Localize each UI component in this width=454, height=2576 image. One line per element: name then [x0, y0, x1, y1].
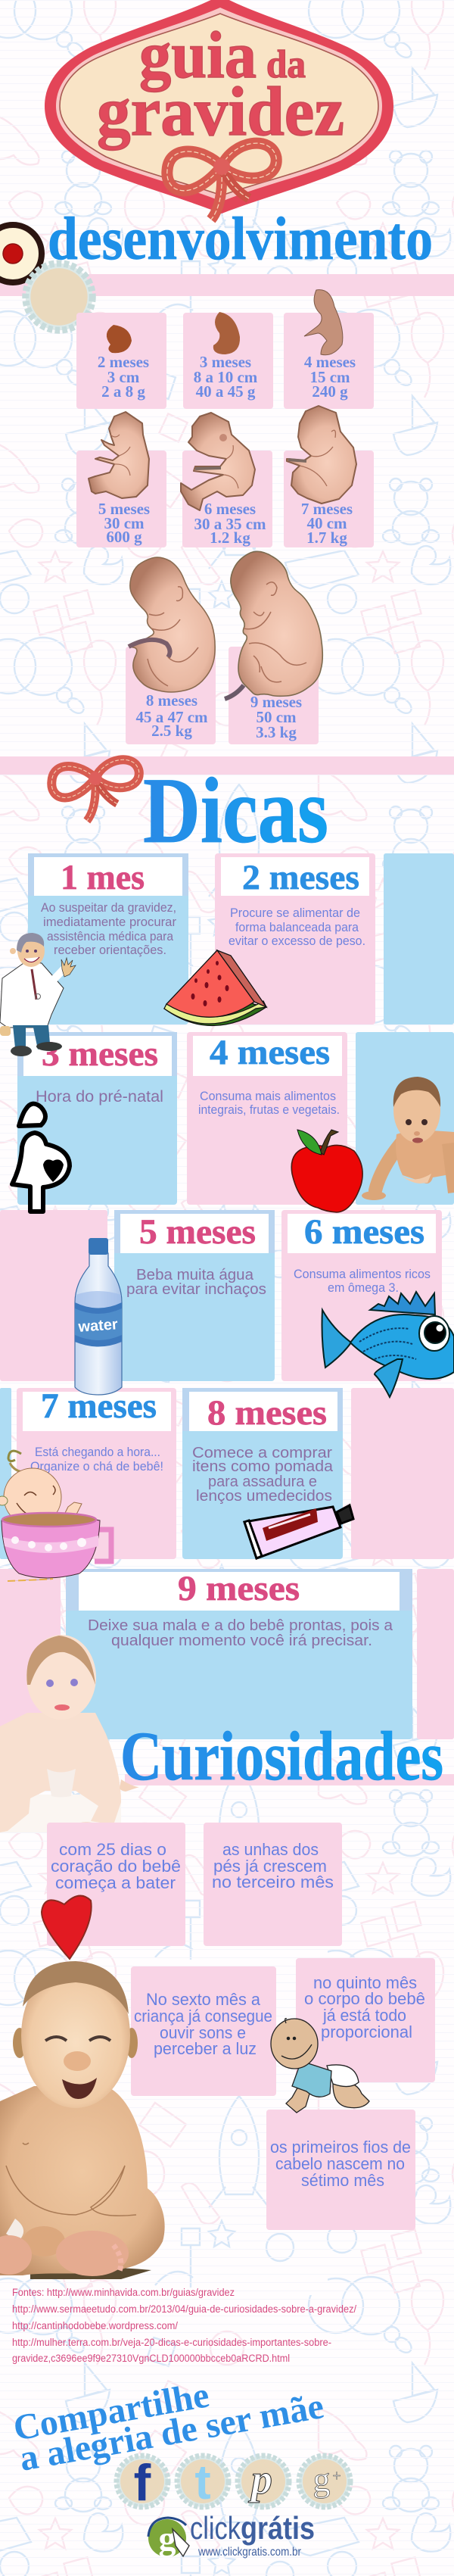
- panel: pink filler 1: [0, 1210, 107, 1381]
- body text: [294, 1268, 431, 1295]
- panel: blue filler 2: [356, 1032, 454, 1205]
- icon: water bottle: water: [77, 1316, 119, 1336]
- body text: assistência médica para: [47, 930, 174, 943]
- photo: crawling baby: [362, 1077, 454, 1200]
- panel: 9 meses: [66, 1569, 412, 1739]
- text: proporcional: [321, 2022, 412, 2041]
- icon: red heart: [42, 1896, 92, 1959]
- header: [120, 1214, 269, 1253]
- text: no terceiro mês: [212, 1873, 334, 1891]
- title badge: [45, 0, 393, 214]
- card: 25 dias: [47, 1823, 185, 1946]
- body text: Beba muita água: [136, 1267, 254, 1283]
- panel: pink filler 4: [417, 1569, 454, 1739]
- heading: compartilhe: Compartilhe: [11, 2375, 212, 2449]
- text: 2 meses: 2 a 8 g: [101, 382, 145, 401]
- decorative doily: [26, 264, 92, 330]
- body text: Deixe sua mala e a do bebê prontas, pois a: [88, 1617, 393, 1634]
- card: primeiros fios: [266, 2110, 415, 2230]
- heading: 8 meses: [207, 1393, 327, 1433]
- text: 5 meses: 600 g: [106, 528, 142, 546]
- body text: Ao suspeitar da gravidez,: [41, 901, 176, 915]
- body text: Consuma alimentos ricos: [294, 1268, 431, 1281]
- heading band: curiosidades: [125, 1774, 454, 1785]
- icon: pinterest: p: [248, 2456, 272, 2503]
- text: [270, 2138, 411, 2190]
- body text: lenços umedecidos: [196, 1488, 332, 1505]
- icon: fetus 3: [213, 312, 240, 354]
- panel: 1 mes: [28, 853, 188, 1024]
- text: 8 meses: 8 meses: [146, 691, 197, 709]
- card: sexto mes: [131, 1966, 276, 2096]
- header: [79, 1572, 400, 1611]
- panel: 3 meses: [17, 1032, 177, 1205]
- icon: fetus 7: [287, 406, 356, 504]
- ribbon bow: [167, 143, 276, 220]
- text: 7 meses: 7 meses: [301, 500, 353, 518]
- text: No sexto mês a: [146, 1990, 261, 2009]
- icon: fetus 5: [89, 412, 149, 498]
- panel: fetus 4 meses: [284, 290, 374, 409]
- text: criança já consegue: [134, 2007, 272, 2026]
- icon: pinterest: [238, 2456, 289, 2507]
- icon: red button: [0, 225, 42, 282]
- ribbon bow 2: [51, 759, 139, 821]
- text: 9 meses: 3.3 kg: [256, 723, 297, 741]
- text: [212, 1840, 334, 1891]
- text: já está todo: [322, 2006, 406, 2025]
- body text: Hora do pré-natal: [36, 1088, 163, 1106]
- text: 9 meses: 50 cm: [256, 708, 297, 726]
- text: 8 meses: 45 a 47 cm: [135, 708, 208, 726]
- header band: dicas: [0, 756, 454, 775]
- heading: 4 meses: [210, 1033, 330, 1072]
- heading: 7 meses: [41, 1386, 157, 1426]
- text: coração do bebê: [51, 1857, 181, 1876]
- icon: twitter: t: [194, 2455, 211, 2509]
- panel: fetus 3 meses: [183, 312, 273, 409]
- title text: gravidez: [97, 73, 344, 150]
- logo: clickgratis: g: [159, 2519, 176, 2558]
- text: cabelo nascem no: [275, 2154, 405, 2173]
- body text: integrais, frutas e vegetais.: [198, 1103, 340, 1117]
- body text: [126, 1267, 266, 1298]
- icon: google plus: g: [313, 2460, 330, 2499]
- text block: sources: http://mulher.terra.com.br/veja-20-dicas-e-curiosidades-importantes-sobre-: [12, 2337, 331, 2348]
- panel: fetus 9 meses: [225, 551, 322, 744]
- icon: twitter: [177, 2455, 229, 2509]
- heading: 9 meses: [178, 1569, 300, 1608]
- icon: fetus 2: [107, 325, 132, 353]
- header: [34, 857, 182, 896]
- text: 3 meses: 40 a 45 g: [196, 382, 256, 401]
- text: 4 meses: 240 g: [312, 382, 348, 401]
- panel: 5 meses: [114, 1210, 275, 1381]
- body text: Comece a comprar: [192, 1445, 332, 1461]
- text: [51, 1840, 181, 1892]
- text: o corpo do bebê: [304, 1989, 425, 2008]
- body text: itens como pomada: [192, 1458, 334, 1475]
- body text: para assadura e: [208, 1474, 317, 1490]
- heading: Dicas: Dicas: [143, 759, 328, 862]
- text: 6 meses: 6 meses: [204, 500, 256, 518]
- panel: 7 meses: [17, 1386, 176, 1559]
- icon: facebook: [117, 2454, 168, 2512]
- icon: watermelon: [164, 950, 266, 1026]
- heading: 5 meses: [139, 1212, 256, 1252]
- text: os primeiros fios de: [270, 2138, 411, 2157]
- heading: compartilhe: a alegria de ser mãe: [17, 2386, 327, 2479]
- title text: [97, 19, 344, 150]
- text: [304, 1973, 425, 2041]
- text: 3 meses: 8 a 10 cm: [194, 368, 258, 386]
- body text: Organize o chá de bebê!: [30, 1460, 163, 1474]
- icon: google plus: [299, 2456, 350, 2507]
- body text: Está chegando a hora...: [35, 1445, 160, 1459]
- panel: fetus 7 meses: [284, 406, 374, 547]
- text: começa a bater: [55, 1873, 176, 1892]
- text: 9 meses: 9 meses: [250, 693, 302, 711]
- panel: fetus 6 meses: [181, 413, 272, 547]
- body text: [88, 1617, 393, 1649]
- body text: [192, 1445, 334, 1505]
- panel: 8 meses: [182, 1388, 343, 1559]
- logo: clickgratis: grátis: [241, 2510, 315, 2546]
- body text: imediatamente procurar: [43, 915, 177, 929]
- panel: 6 meses: [281, 1210, 442, 1381]
- text: 2 meses: 2 meses: [98, 353, 149, 371]
- panel: blue filler 3: [0, 1388, 11, 1559]
- header: [221, 857, 369, 896]
- icon: baby in tea cup: [0, 1451, 111, 1581]
- body text: [30, 1445, 163, 1474]
- text: 7 meses: 1.7 kg: [306, 529, 347, 547]
- text: 4 meses: 15 cm: [309, 368, 350, 386]
- text: 2 meses: 3 cm: [107, 368, 140, 386]
- body text: Consuma mais alimentos: [200, 1090, 336, 1103]
- header: [23, 1036, 172, 1076]
- body text: evitar o excesso de peso.: [229, 934, 365, 948]
- heading: 1 mes: [61, 858, 145, 897]
- body text: qualquer momento você irá precisar.: [111, 1633, 372, 1649]
- panel: 2 meses: [215, 853, 375, 1024]
- icon: fetus 4: [304, 290, 343, 355]
- title text: da: [266, 43, 306, 86]
- icon: google plus: +: [332, 2468, 341, 2484]
- title text: guia: [139, 19, 257, 92]
- icon: pregnant woman: [12, 1104, 70, 1212]
- text: sétimo mês: [301, 2171, 384, 2190]
- text block: sources: http://cantinhodobebe.wordpress.com/: [12, 2320, 178, 2331]
- body text: [229, 906, 365, 948]
- body text: [41, 901, 177, 957]
- icon: fetus 8: [129, 557, 215, 692]
- body text: forma balanceada para: [235, 921, 359, 934]
- header band: desenvolvimento: [0, 274, 454, 296]
- photo: smiling baby: [0, 1961, 165, 2279]
- card: quinto mes: [296, 1958, 435, 2082]
- panel: blue filler 1: [384, 853, 454, 1024]
- icon: fetus 9: [225, 551, 322, 699]
- text: com 25 dias o: [59, 1840, 166, 1859]
- text: as unhas dos: [222, 1840, 319, 1859]
- icon: fish: [322, 1292, 454, 1397]
- text block: sources: Fontes: http://www.minhavida.com.br/guias/gravidez: [12, 2287, 235, 2298]
- text: pés já crescem: [213, 1857, 327, 1876]
- text block: sources: [12, 2287, 356, 2364]
- panel: fetus 2 meses: [76, 313, 166, 409]
- panel: fetus 5 meses: [76, 412, 166, 547]
- icon: facebook: f: [134, 2454, 151, 2512]
- heading: 3 meses: [42, 1034, 158, 1074]
- text: 3 meses: 3 meses: [200, 353, 251, 371]
- heading: 6 meses: [304, 1212, 424, 1252]
- body text: Procure se alimentar de: [230, 906, 360, 920]
- text: 5 meses: 5 meses: [98, 500, 150, 518]
- body text: receber orientações.: [54, 943, 166, 957]
- text: 8 meses: 2.5 kg: [151, 722, 192, 740]
- text: 7 meses: 40 cm: [306, 514, 347, 532]
- header: [189, 1392, 337, 1431]
- text: no quinto mês: [313, 1973, 417, 1992]
- icon: water bottle: [75, 1238, 122, 1395]
- logo: clickgratis: [148, 2510, 315, 2559]
- text: [134, 1990, 272, 2058]
- header: [288, 1214, 436, 1253]
- logo: clickgratis: click: [190, 2510, 241, 2546]
- body text: [198, 1090, 340, 1117]
- card: unhas: [204, 1823, 342, 1946]
- photo: baby crawling 9 meses: [0, 1635, 139, 1834]
- text: 4 meses: 4 meses: [304, 353, 356, 371]
- icon: fetus 6: [181, 413, 255, 510]
- icon: cartoon baby: [271, 2019, 369, 2113]
- icon: doctor: [0, 933, 76, 1056]
- text: 6 meses: 1.2 kg: [210, 529, 250, 547]
- panel: pink filler 3: [0, 1569, 61, 1739]
- panel: pink filler 2: [351, 1388, 454, 1559]
- heading: 2 meses: [242, 858, 359, 897]
- panel: fetus 8 meses: [126, 557, 216, 744]
- panel: 4 meses: [187, 1032, 347, 1205]
- text block: sources: http://www.sermaeetudo.com.br/2013/04/guia-de-curiosidades-sobre-a-gravidez/: [12, 2303, 356, 2315]
- body text: em ômega 3.: [328, 1281, 399, 1295]
- header: [23, 1392, 171, 1431]
- text: ouvir sons e: [160, 2023, 246, 2042]
- logo: clickgratis: www.clickgratis.com.br: [197, 2546, 302, 2559]
- text block: sources: gravidez,c3696ee9f9e27310VgnCLD100000bbcceb0aRCRD.html: [12, 2353, 290, 2364]
- text: 5 meses: 30 cm: [104, 514, 145, 532]
- icon: apple: [291, 1130, 362, 1212]
- text: 6 meses: 30 a 35 cm: [194, 515, 266, 533]
- header: [193, 1036, 342, 1076]
- body text: para evitar inchaços: [126, 1281, 266, 1298]
- icon: ointment tube: [244, 1505, 353, 1558]
- text: perceber a luz: [154, 2039, 257, 2058]
